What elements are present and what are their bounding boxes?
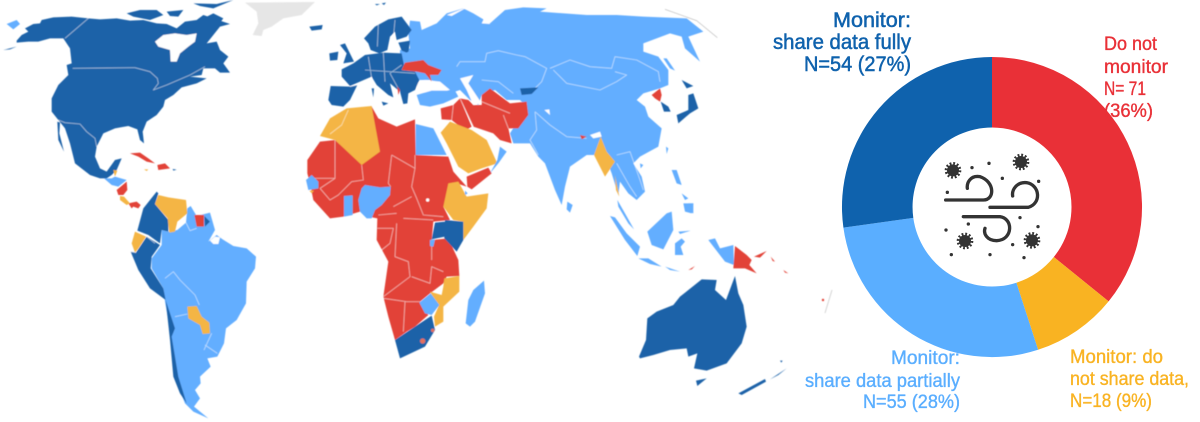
South America borders <box>131 223 217 353</box>
snow dots <box>944 162 1040 259</box>
label: do not monitor: (36%) <box>1104 101 1153 122</box>
label: monitor, share data fully: share data fully <box>773 31 911 54</box>
Uganda and Kenya <box>432 220 463 252</box>
icon: wind and snow <box>944 155 1040 259</box>
Russia, China, India and neighbours <box>400 7 703 205</box>
label: monitor, do not share data: Monitor: do <box>1070 347 1163 368</box>
Paraguay <box>187 306 210 334</box>
label: monitor, share data partially: share data partially <box>805 371 960 392</box>
donut: monitor, share data fully <box>842 57 992 228</box>
Morocco border <box>330 110 348 134</box>
Brazil, Argentina, Bolivia <box>152 206 256 418</box>
Ethiopia and Somalia <box>443 182 488 240</box>
Scandinavia <box>364 17 412 53</box>
Indonesia and Malay peninsula <box>610 200 734 272</box>
Lesotho and Eswatini <box>420 329 434 344</box>
Kyrgyzstan <box>520 87 538 95</box>
Hudson Bay <box>155 33 197 62</box>
continental Europe <box>342 53 419 104</box>
label: monitor, share data fully: N=54 (27%) <box>804 53 911 76</box>
Djibouti <box>465 191 468 195</box>
South Sudan lake <box>426 198 429 202</box>
Turkey <box>417 91 458 107</box>
Mozambique <box>430 276 459 327</box>
Canada, USA and Mexico <box>17 15 230 178</box>
Ghana <box>344 195 353 217</box>
Amazon mouth <box>210 237 220 244</box>
Pacific islands <box>822 290 832 313</box>
Oceania and Southeast Asia <box>610 200 788 395</box>
Iceland and Svalbard <box>309 3 386 31</box>
Sub-Saharan Africa <box>306 107 488 358</box>
Papua New Guinea and islands <box>688 246 788 273</box>
label: monitor, share data fully <box>773 9 911 76</box>
label: monitor, do not share data: N=18 (9%) <box>1070 391 1152 412</box>
Baltics <box>398 41 410 53</box>
label: monitor, do not share data: not share data, <box>1070 369 1189 390</box>
Tasmania and New Zealand <box>696 361 787 395</box>
Guinea-Bissau <box>309 191 314 193</box>
Middle East borders <box>452 98 510 128</box>
Madagascar <box>466 281 485 327</box>
Africa borders <box>307 140 443 332</box>
label: do not monitor: N= 71 <box>1104 79 1146 100</box>
North America <box>3 0 315 187</box>
Venezuela <box>155 195 187 233</box>
Europe borders <box>350 20 415 92</box>
snowflakes <box>946 155 1039 248</box>
red countries <box>307 107 467 340</box>
Chukotka edge <box>665 9 717 38</box>
donut: do not monitor <box>992 57 1142 301</box>
donut chart <box>842 57 1142 357</box>
Korea <box>652 88 662 102</box>
label: monitor, share data partially: Monitor: <box>891 348 960 369</box>
South America <box>117 182 256 418</box>
label: do not monitor <box>1104 34 1169 122</box>
label: do not monitor: Do not <box>1104 34 1158 55</box>
Egypt <box>416 124 447 155</box>
Oman <box>490 147 507 173</box>
Europe and North Africa <box>309 3 447 167</box>
Ukraine and Balkan patch <box>397 60 442 95</box>
label: do not monitor: monitor <box>1104 57 1169 78</box>
wind lines <box>946 176 1038 241</box>
Asia borders <box>457 51 660 197</box>
Suriname <box>194 215 204 227</box>
Colombia <box>137 192 168 243</box>
Chukotka tip <box>7 20 20 29</box>
Caribbean and Central America <box>104 153 177 187</box>
South Africa <box>395 316 435 358</box>
Zimbabwe <box>419 293 439 315</box>
donut: monitor, share data partially <box>843 218 1038 357</box>
Myanmar and Thailand strip <box>594 137 619 197</box>
Peru and Chile <box>131 237 187 403</box>
North America borders <box>58 18 205 147</box>
Sakhalin, Sri Lanka, Taiwan, Hainan <box>567 58 675 213</box>
Nigeria <box>358 185 391 218</box>
Lake Victoria <box>430 239 435 247</box>
label: monitor, share data partially <box>805 348 960 413</box>
Belarus <box>404 48 423 63</box>
Iraq, Syria, Iran, Afghanistan <box>441 88 587 189</box>
Senegal <box>306 175 318 190</box>
Russia and Asia <box>400 7 717 213</box>
Greenland <box>245 2 315 36</box>
Baja California and Arctic islands <box>3 0 233 152</box>
Ecuador <box>132 232 146 253</box>
label: monitor, share data fully: Monitor: <box>833 9 911 32</box>
Japan <box>677 80 698 123</box>
Black Sea and Caspian Sea <box>417 7 602 138</box>
label: monitor, do not share data <box>1070 347 1189 412</box>
French Guiana <box>204 216 210 227</box>
world map <box>3 0 832 418</box>
Philippines <box>672 170 693 213</box>
Nicaragua, Costa Rica, Panama <box>117 182 141 208</box>
Australia <box>639 276 747 371</box>
Algeria and Morocco <box>320 106 382 167</box>
Spain and islands <box>328 85 388 107</box>
donut: monitor, do not share data <box>1016 257 1109 350</box>
label: monitor, share data partially: N=55 (28%) <box>863 392 960 413</box>
UK and Ireland <box>329 43 354 63</box>
Saudi Arabia <box>441 122 497 173</box>
